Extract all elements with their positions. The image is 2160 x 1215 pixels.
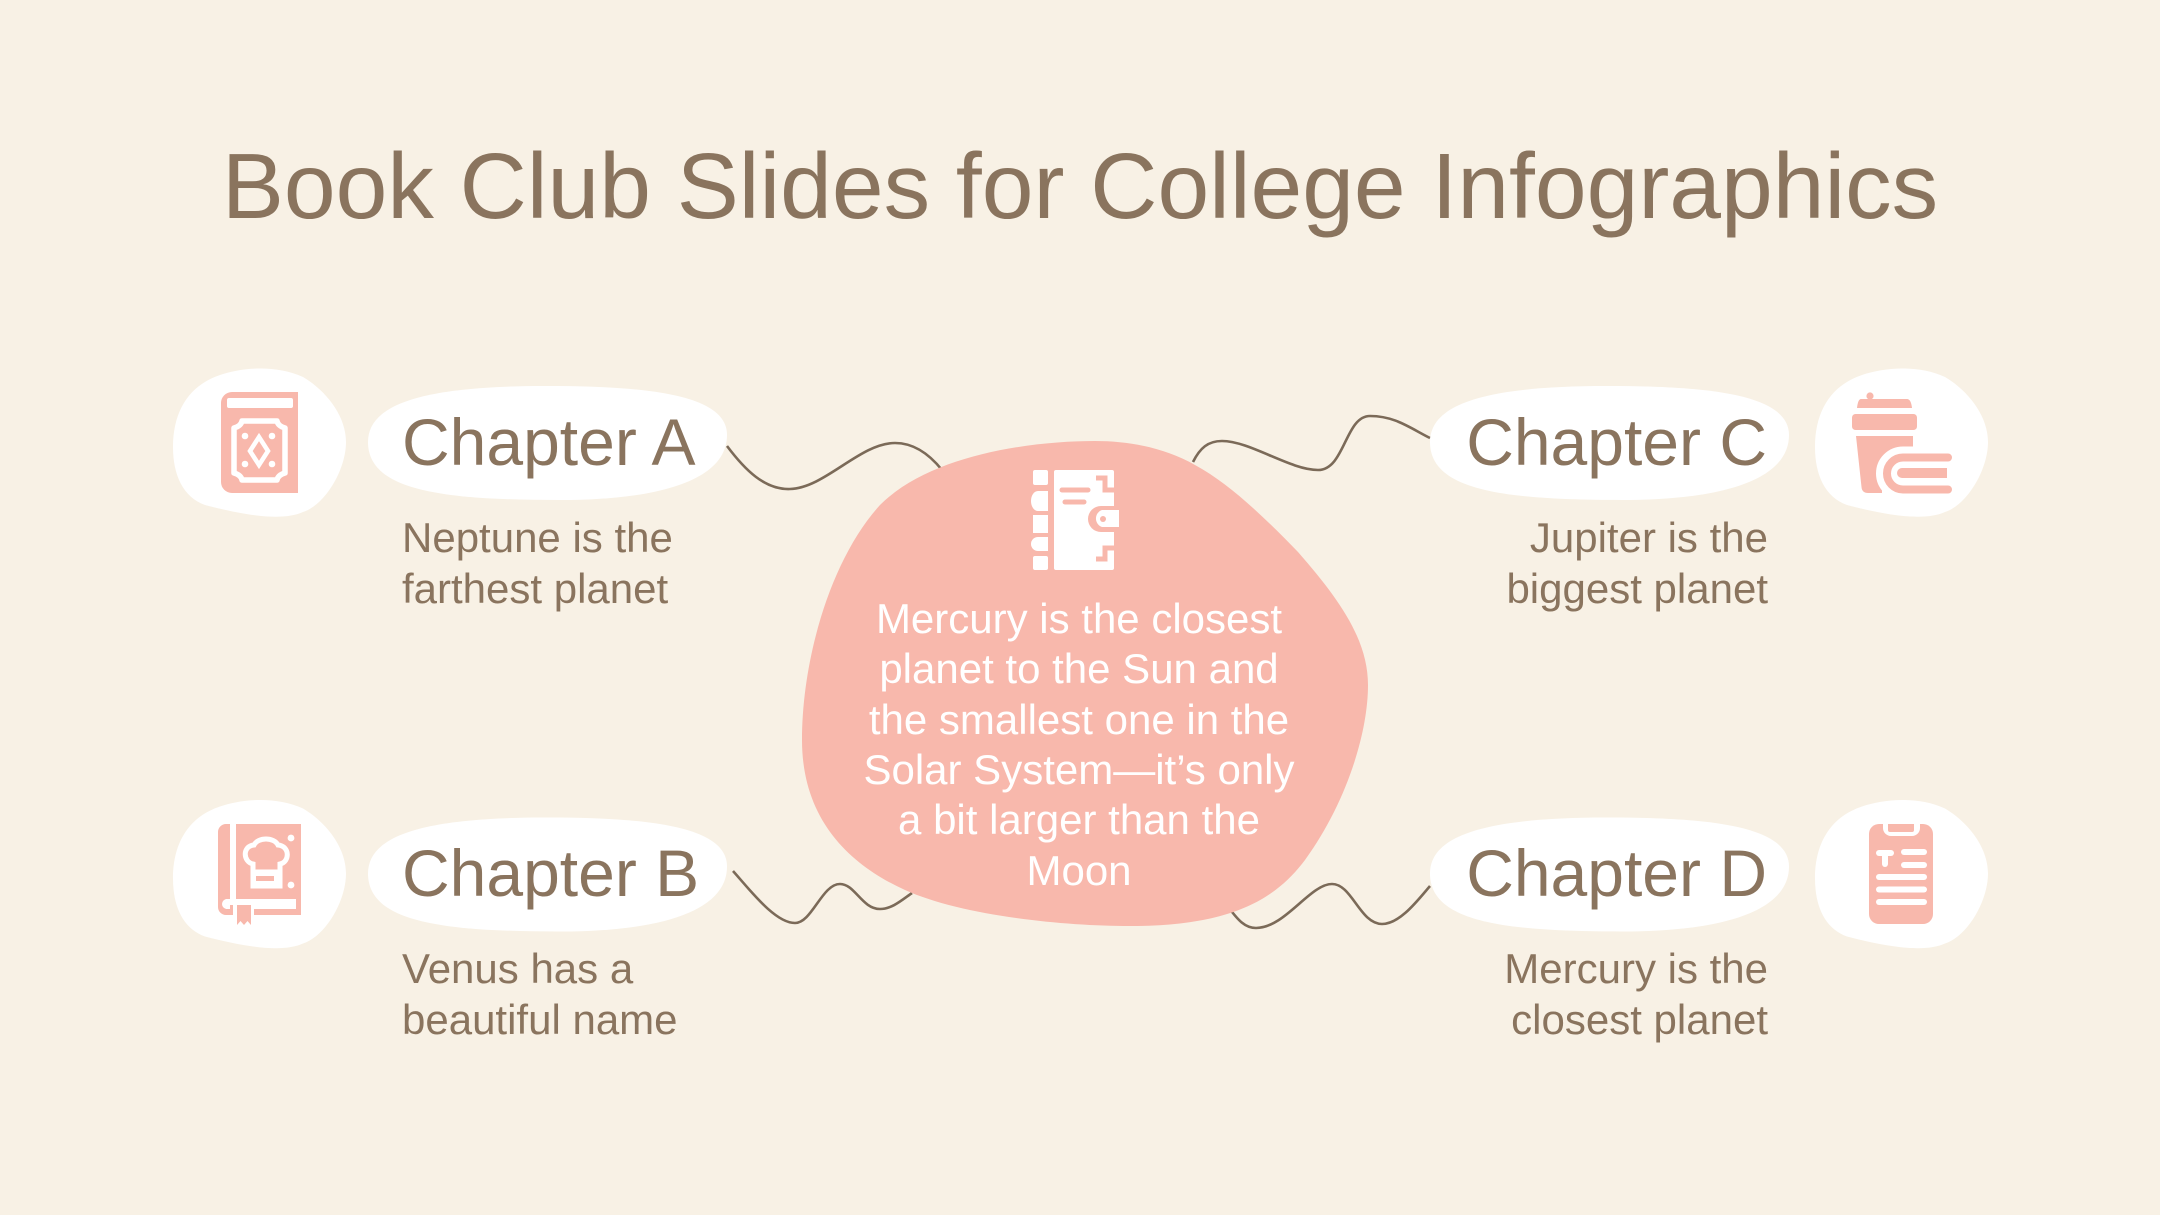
connector: chapter A to centre <box>727 443 942 489</box>
text: chapter B description <box>402 945 678 1043</box>
heading: chapter C: Chapter C <box>1466 405 1767 479</box>
connector: chapter C to centre <box>1193 416 1430 470</box>
heading: chapter B: Chapter B <box>402 836 699 910</box>
icon: cookbook <box>218 824 301 928</box>
central text: the smallest one in the <box>869 696 1289 743</box>
central text: Mercury is the closest <box>876 595 1282 642</box>
panel: chapter C <box>1430 368 1988 612</box>
panel: chapter A <box>173 368 727 612</box>
text: chapter D description: Mercury is the <box>1504 945 1768 992</box>
panel: central blob <box>802 441 1368 926</box>
icon: coffee cup and book <box>1852 392 1948 493</box>
heading: chapter A: Chapter A <box>402 405 696 479</box>
title: Book Club Slides for College Infographics <box>222 134 1938 238</box>
icon: ornate book <box>221 392 298 493</box>
text: chapter A description: Neptune is the <box>402 514 673 561</box>
panel: chapter B <box>173 800 727 1043</box>
central text: Solar System—it’s only <box>863 746 1295 793</box>
text: chapter B description: beautiful name <box>402 996 678 1043</box>
icon: notebook <box>1031 470 1120 570</box>
text: chapter B description: Venus has a <box>402 945 634 992</box>
panel: chapter D <box>1430 800 1988 1043</box>
connector: chapter D to centre <box>1229 884 1430 928</box>
central text: a bit larger than the <box>898 796 1260 843</box>
text: chapter C description: biggest planet <box>1506 565 1768 612</box>
text: chapter C description <box>1506 514 1768 612</box>
central text: Moon <box>1026 847 1132 894</box>
text: chapter A description: farthest planet <box>402 565 669 612</box>
central text: planet to the Sun and <box>879 645 1279 692</box>
text: chapter A description <box>402 514 673 612</box>
connector: chapter B to centre <box>733 871 912 923</box>
icon: clipboard <box>1869 824 1933 924</box>
text: chapter D description <box>1504 945 1768 1043</box>
heading: chapter D: Chapter D <box>1466 836 1767 910</box>
central text <box>863 595 1295 894</box>
text: chapter D description: closest planet <box>1511 996 1768 1043</box>
text: chapter C description: Jupiter is the <box>1530 514 1768 561</box>
